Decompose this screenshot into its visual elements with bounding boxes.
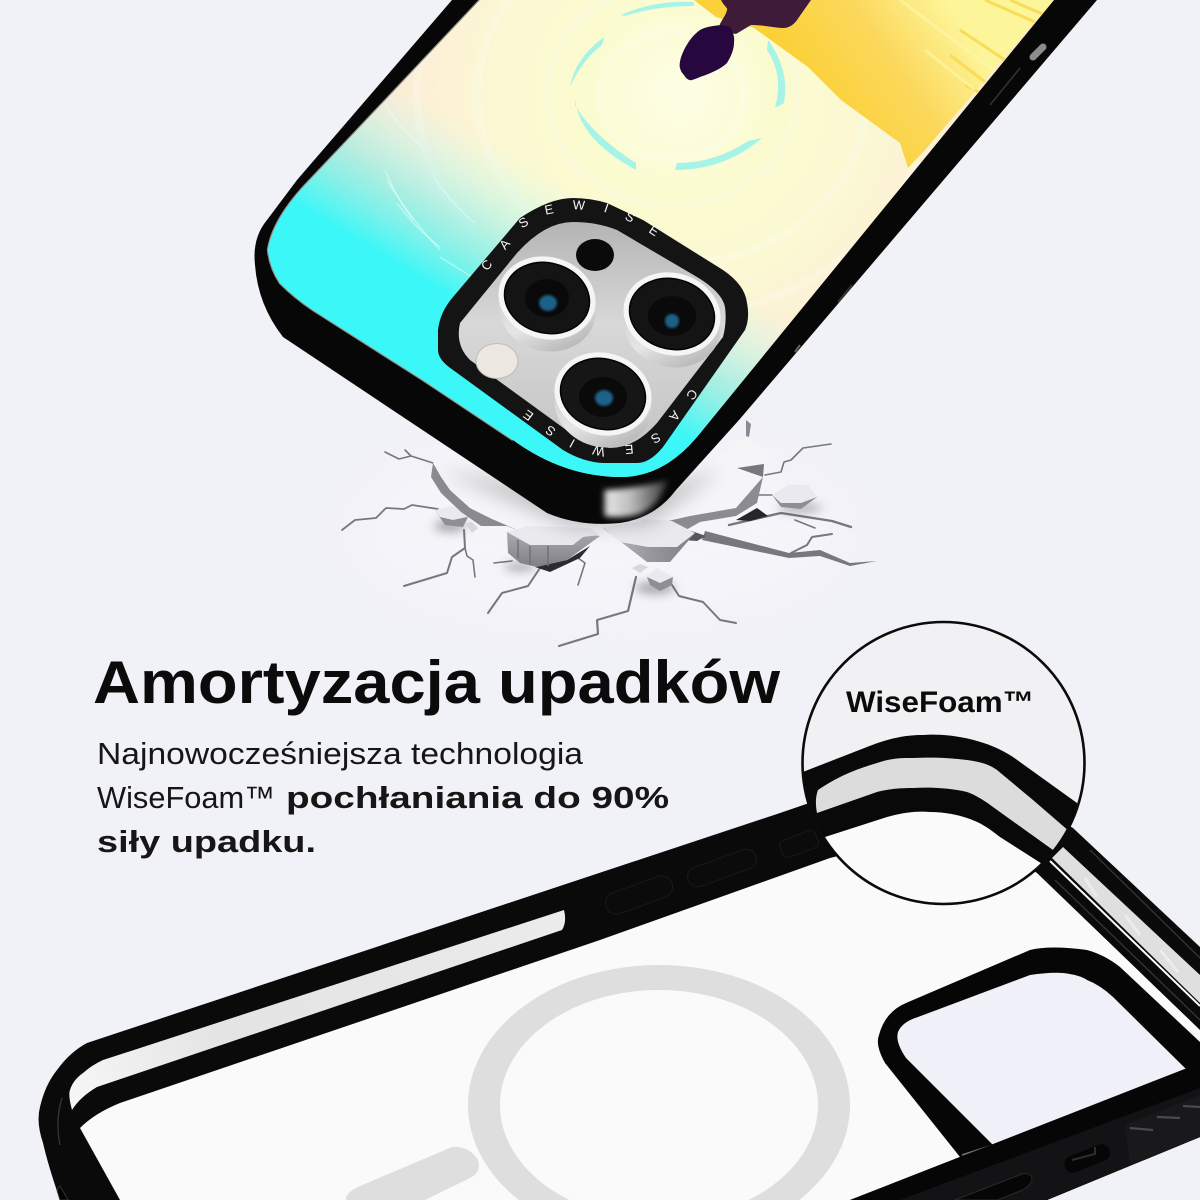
wedge crack right [702, 531, 877, 566]
microphone hole [576, 239, 614, 271]
cape streaks [950, 0, 1045, 103]
right slab side [668, 477, 763, 535]
chunk: small left [435, 506, 478, 533]
camera island [438, 198, 748, 463]
callout label: WiseFoam™ [846, 686, 1034, 719]
callout ring [802, 622, 1084, 904]
phone with printed case [254, 0, 1097, 536]
interior back panel [80, 825, 1200, 1200]
flash [476, 344, 518, 378]
right stripe sheen [1085, 878, 1178, 972]
clear case with MagSafe [39, 770, 1200, 1200]
texture marks [1130, 1106, 1200, 1130]
band texture [1125, 1095, 1200, 1165]
case frame [254, 0, 1097, 524]
heading: Amortyzacja upadków [93, 649, 780, 716]
side buttons [795, 47, 1043, 352]
yellow cape [694, 0, 1054, 168]
chunks: small bottom [632, 564, 673, 591]
left slab side [431, 463, 522, 532]
swirl rings [422, 0, 917, 270]
white gap line [1050, 861, 1200, 1006]
case reflection [604, 480, 668, 517]
lens bottom [545, 342, 661, 446]
lens top [489, 246, 605, 350]
line 2 bold: pochłaniania do 90% [286, 780, 669, 815]
lens right [614, 262, 730, 366]
body copy [97, 736, 669, 859]
camera cutout [878, 948, 1200, 1157]
right slab [620, 437, 770, 522]
chunk: centre left [507, 526, 600, 572]
screen rim [268, 0, 513, 440]
crack lines [342, 444, 851, 646]
chunk: small right [772, 485, 817, 509]
soft shadows [434, 504, 822, 594]
line 3 bold: siły upadku. [97, 824, 316, 859]
MagSafe ring [468, 965, 850, 1200]
left side stripe [69, 910, 565, 1110]
right side stripe [1052, 847, 1200, 1003]
water streaks [385, 103, 475, 277]
case outer frame [39, 770, 1200, 1200]
magnified frame detail [795, 735, 1090, 905]
lens bodies [489, 256, 730, 458]
line 2 regular: WiseFoam™ [97, 780, 275, 815]
shadow on ground [440, 470, 720, 528]
lower frame band [850, 1063, 1200, 1200]
lower port [1062, 1142, 1113, 1175]
line 1: Najnowocześniejsza technologia [97, 736, 584, 771]
brand text top: CASEWISE [482, 200, 660, 270]
MagSafe pill [346, 1147, 479, 1200]
impact crater with cracks [342, 420, 877, 646]
left port hole [57, 1186, 68, 1200]
printed artwork [250, 0, 1100, 490]
dark wedges [736, 508, 768, 521]
magnified callout [795, 622, 1090, 905]
frame gloss lines [58, 850, 1200, 1145]
chunk: centre right [603, 519, 695, 562]
side buttons [602, 829, 820, 917]
teal arcs [570, 2, 785, 170]
lower button [955, 1174, 1032, 1200]
lens well [459, 222, 726, 448]
brand text bottom: CASEWISE [522, 390, 696, 457]
lower band shaded face [900, 1088, 1200, 1200]
left slab [433, 420, 640, 526]
silhouette [718, 0, 811, 34]
